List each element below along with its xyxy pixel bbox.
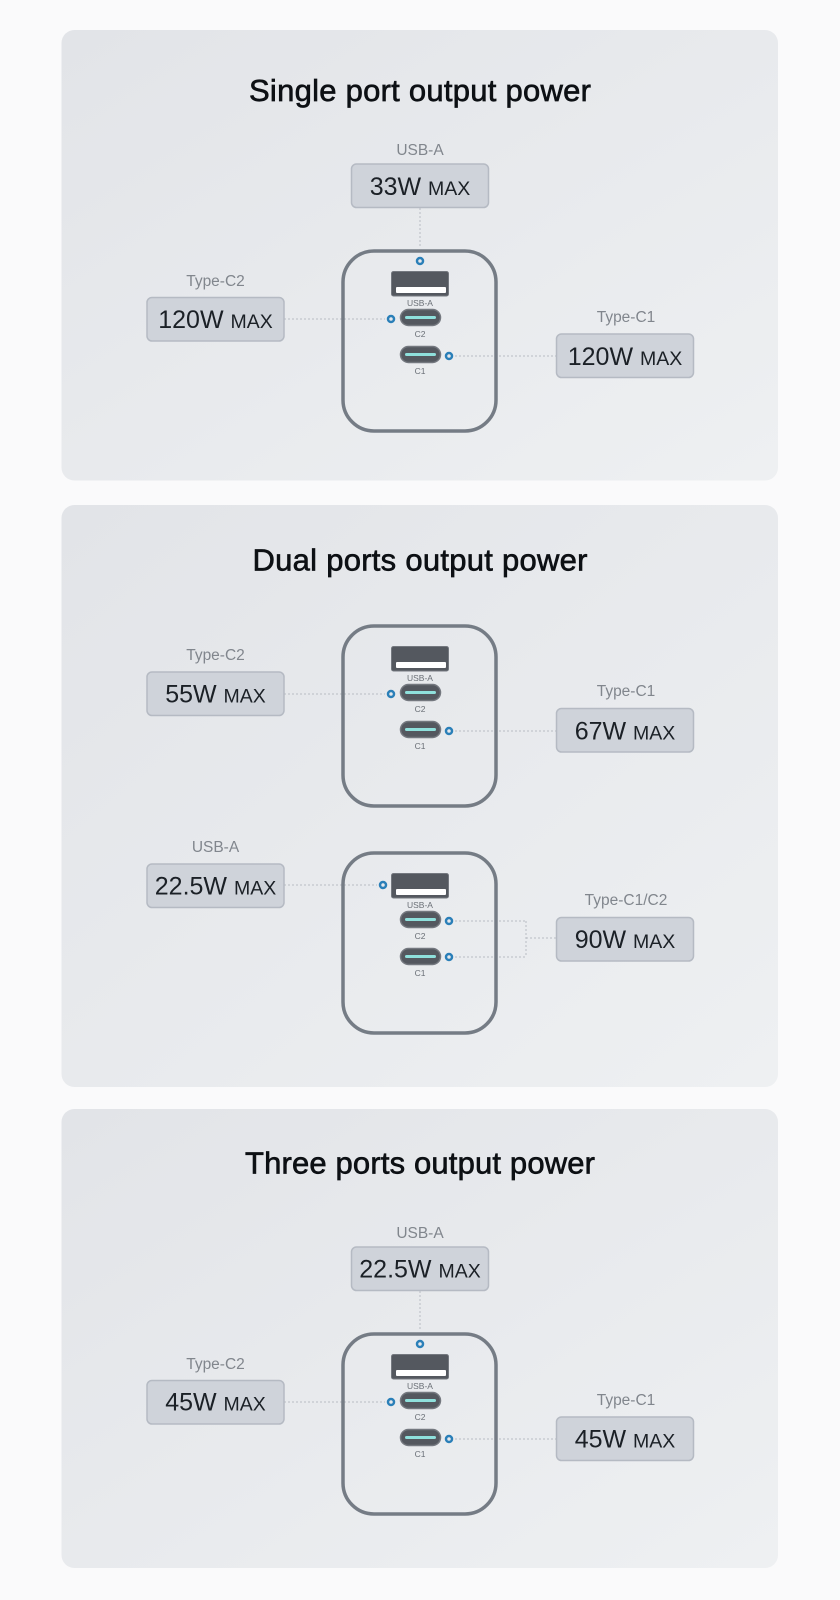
heading: dual ports: Dual ports output power bbox=[252, 542, 588, 578]
charger diagram: single port: C1 bbox=[415, 366, 426, 376]
callout: Type-C1/C2 90W: 90W MAX bbox=[575, 926, 675, 954]
callout: Type-C2 55W: Type-C2 bbox=[186, 647, 245, 664]
callout: Type-C2 120W: Type-C2 bbox=[186, 273, 245, 290]
panel: three ports output power bbox=[62, 1109, 778, 1568]
heading: single port: Single port output power bbox=[249, 73, 591, 108]
callout: Type-C2 45W: 45W MAX bbox=[165, 1388, 266, 1416]
callout: Type-C1 67W: 67W MAX bbox=[575, 718, 675, 746]
callout: USB-A 33W bbox=[352, 142, 488, 208]
callout: Type-C1 45W: Type-C1 bbox=[597, 1392, 655, 1409]
charger diagram: three ports: C1 bbox=[415, 1449, 426, 1459]
callout: Type-C2 120W bbox=[147, 273, 284, 341]
callout: Type-C1 45W bbox=[556, 1392, 694, 1460]
callout: USB-A 22.5W: 22.5W MAX bbox=[359, 1256, 481, 1284]
callout: Type-C2 45W bbox=[147, 1356, 284, 1424]
callout: Type-C1 120W: Type-C1 bbox=[597, 309, 655, 326]
charger diagram: USB-A and C1/C2: C2 bbox=[415, 931, 426, 941]
callout: Type-C1/C2 90W: Type-C1/C2 bbox=[585, 892, 667, 909]
callout: USB-A 33W: USB-A bbox=[396, 142, 444, 159]
charger diagram: three ports: USB-A bbox=[407, 1381, 433, 1391]
callout: Type-C1 67W: Type-C1 bbox=[597, 683, 655, 700]
callout: Type-C1 120W: 120W MAX bbox=[568, 343, 682, 371]
charger diagram: three ports: C2 bbox=[415, 1412, 426, 1422]
heading: three ports: Three ports output power bbox=[245, 1146, 595, 1180]
callout: USB-A 22.5W bbox=[352, 1225, 488, 1290]
panel: single port output power bbox=[62, 30, 778, 480]
charger diagram: USB-A and C1/C2: C1 bbox=[415, 968, 426, 978]
charger diagram: single port bbox=[284, 208, 556, 431]
charger diagram: three ports bbox=[284, 1291, 556, 1514]
callout: USB-A 22.5W: USB-A bbox=[396, 1225, 444, 1242]
callout: Type-C1/C2 90W bbox=[556, 892, 694, 961]
charger diagram: single port: C2 bbox=[415, 329, 426, 339]
callout: Type-C1 67W bbox=[556, 683, 694, 752]
callout: Type-C1 45W: 45W MAX bbox=[575, 1426, 675, 1454]
callout: Type-C2 55W bbox=[147, 647, 284, 716]
callout: USB-A 22.5W bbox=[147, 839, 284, 908]
callout: USB-A 33W: 33W MAX bbox=[370, 173, 470, 201]
callout: Type-C2 45W: Type-C2 bbox=[186, 1356, 245, 1373]
callout: Type-C2 120W: 120W MAX bbox=[158, 306, 273, 334]
charger diagram: C1 and C2: C2 bbox=[415, 704, 426, 714]
callout: Type-C1 120W bbox=[556, 309, 694, 378]
callout: USB-A 22.5W: 22.5W MAX bbox=[155, 872, 276, 900]
charger diagram: single port: USB-A bbox=[407, 298, 433, 308]
charger diagram: C1 and C2 bbox=[284, 626, 556, 806]
charger diagram: C1 and C2: USB-A bbox=[407, 673, 433, 683]
callout: USB-A 22.5W: USB-A bbox=[192, 839, 240, 856]
callout: Type-C2 55W: 55W MAX bbox=[165, 680, 266, 708]
charger diagram: USB-A and C1/C2: USB-A bbox=[407, 900, 433, 910]
charger diagram: C1 and C2: C1 bbox=[415, 741, 426, 751]
charger diagram: USB-A and C1/C2 bbox=[284, 853, 556, 1033]
panel: dual ports output power bbox=[62, 505, 778, 1087]
